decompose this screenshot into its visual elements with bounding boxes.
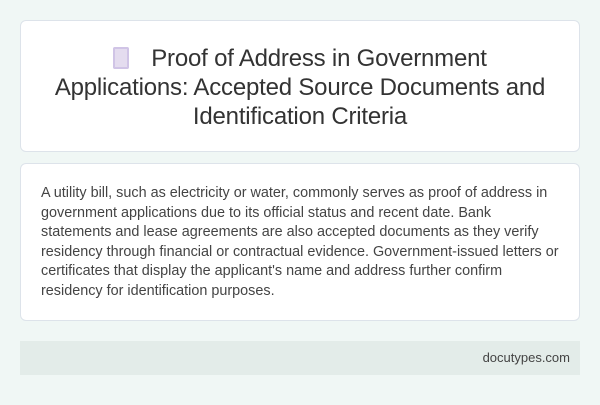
text block: residency for identification purposes. — [41, 282, 275, 298]
text block: statements and lease agreements are also accepted documents as they verify — [41, 224, 539, 240]
text block: government applications due to its official status and recent date. Bank — [41, 204, 491, 220]
footer text: docutypes.com — [483, 350, 570, 365]
title: Identification Criteria — [193, 103, 407, 130]
footer — [20, 341, 580, 375]
panel: title — [20, 20, 580, 152]
panel: description — [20, 163, 580, 321]
title: Applications: Accepted Source Documents and — [55, 74, 545, 101]
text block: certificates that display the applicant's name and address further confirm — [41, 263, 502, 279]
icon: receipt — [113, 47, 129, 69]
title: Proof of Address in Government — [151, 45, 487, 72]
title — [55, 45, 545, 130]
text block: residency through financial or contractual evidence. Government-issued letters or — [41, 244, 559, 260]
text block: A utility bill, such as electricity or water, commonly serves as proof of address in — [41, 185, 547, 201]
text block — [41, 185, 559, 298]
